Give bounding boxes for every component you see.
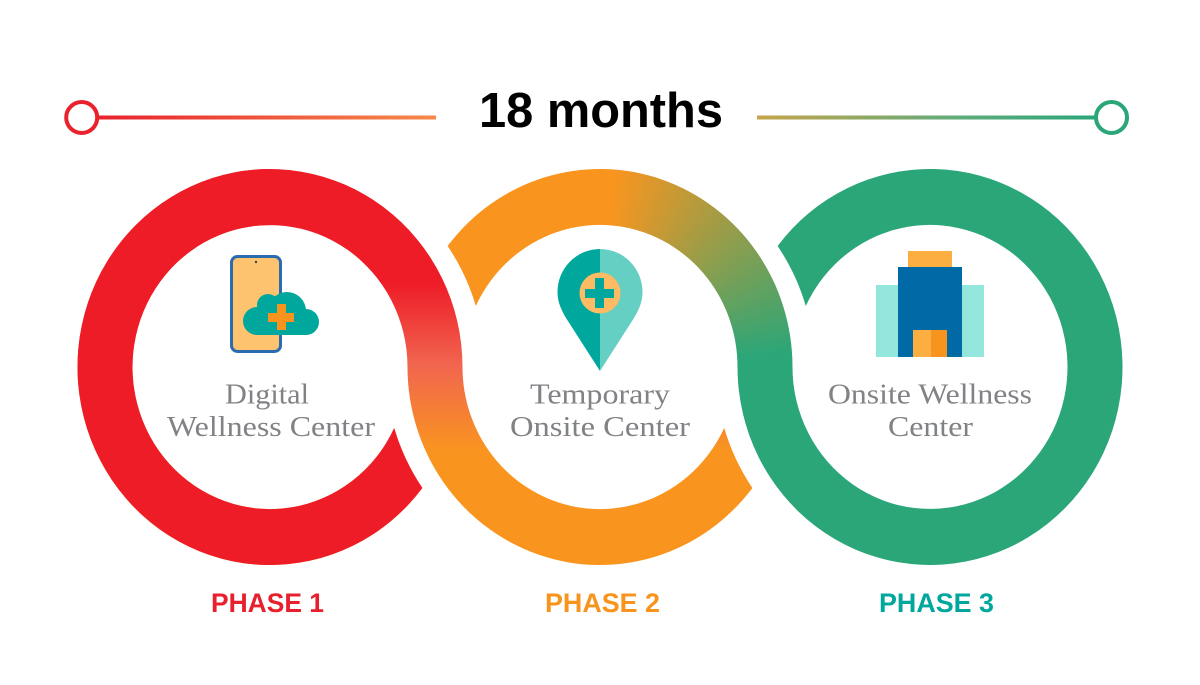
label: onsite wellness center (828, 378, 1032, 443)
label: onsite wellness center: Center (888, 411, 973, 443)
label: temporary onsite center (510, 378, 690, 443)
timeline left (66, 102, 436, 133)
label: digital wellness center (167, 378, 375, 443)
label: digital wellness center: Digital (225, 378, 309, 410)
ring: phase 1 red (78, 169, 422, 565)
ribbon: orange to green gradient band (448, 169, 792, 367)
rings: red and orange ribbon, green ribbon base (78, 169, 1122, 565)
label: temporary onsite center: Onsite Center (510, 411, 690, 443)
ring: phase 3 green (738, 169, 1122, 565)
icon: building (876, 251, 984, 357)
label: phase 2: PHASE 2 (545, 588, 660, 618)
label: phase 1: PHASE 1 (211, 588, 324, 618)
label: phase 3: PHASE 3 (879, 588, 994, 618)
timeline right (757, 102, 1127, 133)
title: 18 months (479, 84, 723, 138)
icon: location pin with cross (558, 249, 642, 371)
label: temporary onsite center: Temporary (530, 378, 671, 410)
label: onsite wellness center: Onsite Wellness (828, 378, 1032, 410)
icon: phone with medical cloud (232, 256, 319, 352)
label: digital wellness center: Wellness Center (167, 411, 375, 443)
ribbon: red to orange gradient band (77, 169, 752, 565)
